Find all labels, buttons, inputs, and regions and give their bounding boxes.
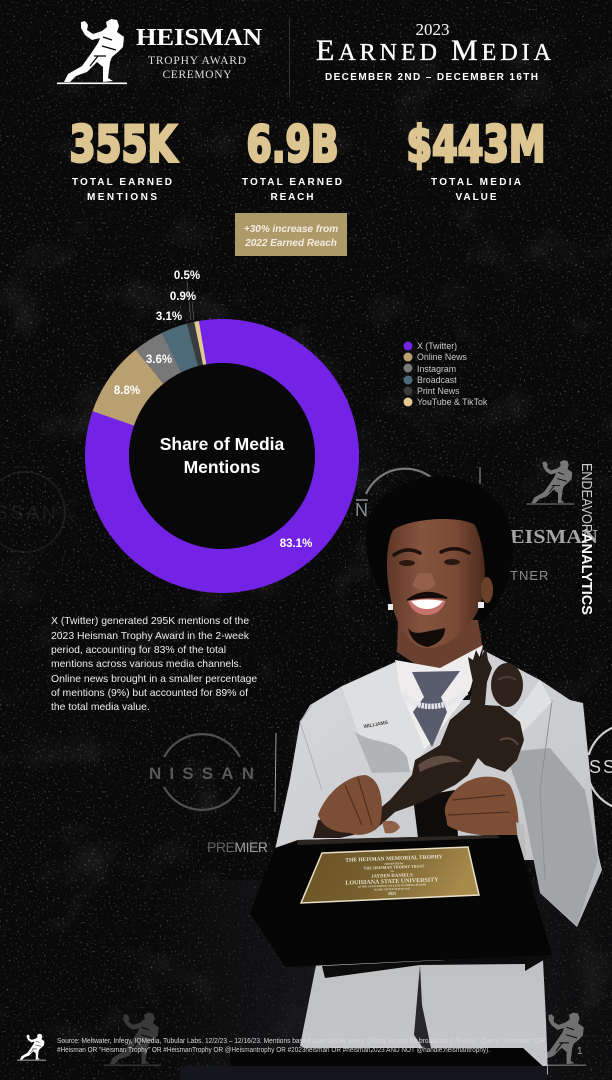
suit vent bbox=[414, 965, 431, 1048]
value: 6.9B bbox=[246, 116, 338, 174]
backdrop logo: left Nissan bbox=[0, 472, 65, 552]
label: TOTAL EARNED bbox=[72, 177, 172, 188]
body text: the total media value. bbox=[51, 702, 150, 713]
stat: total earned mentions bbox=[70, 116, 178, 203]
body text: X (Twitter) generated 295K mentions of the bbox=[51, 616, 249, 627]
trophy figure bbox=[313, 648, 524, 838]
left hand bbox=[318, 775, 400, 835]
photo: Jayden Daniels holding the trophy bbox=[180, 476, 602, 1080]
body text: mentions across various media channels. bbox=[51, 659, 242, 670]
label line 2: REACH bbox=[270, 192, 314, 203]
plaque: TO bbox=[390, 870, 394, 873]
body text: 2023 Heisman Trophy Award in the 2-week bbox=[51, 631, 250, 642]
slices bbox=[60, 294, 384, 618]
center title bbox=[160, 434, 284, 477]
jacket bbox=[275, 650, 602, 927]
slice labels bbox=[114, 270, 312, 550]
vertical brand: Endeavor Analytics bbox=[578, 463, 595, 615]
heading: 2023 Earned Media bbox=[316, 20, 552, 83]
value: 355K bbox=[70, 116, 178, 174]
body text: Online news brought in a smaller percentage bbox=[51, 674, 257, 685]
slice labels: 83.1% bbox=[280, 538, 312, 550]
legend: Instagram bbox=[417, 364, 456, 374]
slice labels: 8.8% bbox=[114, 385, 140, 397]
shirt bbox=[395, 645, 483, 750]
backdrop logo: right Nissan bbox=[586, 724, 612, 810]
slice labels: 3.6% bbox=[146, 354, 172, 366]
stat: total earned reach bbox=[242, 116, 342, 203]
watch bbox=[516, 822, 526, 860]
earrings bbox=[388, 602, 484, 610]
hair bbox=[366, 476, 513, 626]
source note: Source: Meltwater, Infegy, IQMedia, Tubular Labs. 12/2/23 – 12/16/23. Mentions based upon below query. Global except for broadcast (US only). Query: "Heisman" OR bbox=[57, 1038, 545, 1045]
goatee bbox=[408, 628, 445, 647]
eyebrows bbox=[394, 549, 469, 555]
subtitle: TROPHY AWARD bbox=[148, 55, 246, 67]
chain bbox=[403, 692, 467, 706]
year: 2023 bbox=[416, 20, 450, 39]
backdrop logo: Heisman right bbox=[510, 460, 599, 583]
plaque: LOUISIANA STATE UNIVERSITY bbox=[345, 877, 439, 887]
legend: Online News bbox=[417, 352, 467, 362]
header logo: Heisman Trophy Award Ceremony bbox=[57, 19, 263, 84]
legend: Broadcast bbox=[417, 375, 457, 385]
plaque bbox=[301, 847, 479, 903]
trophy highlights bbox=[418, 756, 462, 772]
header divider bbox=[288, 18, 290, 98]
smile bbox=[408, 598, 446, 615]
backdrop logo: Heisman right: EISMAN bbox=[510, 526, 599, 548]
plaque: IN THE UNITED STATES FOR bbox=[374, 887, 410, 892]
backdrop logo: Heisman right: TNER bbox=[510, 568, 549, 583]
slice labels: 0.9% bbox=[170, 291, 196, 303]
backdrop sponsor logos bbox=[0, 460, 612, 1066]
plaque: AS THE OUTSTANDING COLLEGE FOOTBALL PLAYER bbox=[358, 883, 426, 889]
backdrop logo: footer player right bbox=[529, 1013, 586, 1066]
icon: small Heisman logo bbox=[17, 1034, 46, 1060]
podium bbox=[230, 1048, 547, 1070]
leader lines bbox=[187, 282, 194, 320]
backdrop text: premier: PREMIER bbox=[207, 839, 268, 855]
stat: total media value bbox=[406, 116, 546, 203]
source note: #Heisman OR "Heisman Trophy" OR #HeismanTrophy OR @Heismantrophy OR #2023heisman OR #heisman2023 AND NOT @handle:heismantrophy). bbox=[57, 1047, 490, 1054]
trophy body bbox=[313, 648, 524, 838]
trophy base bbox=[250, 835, 552, 967]
base underside shadow bbox=[322, 955, 552, 978]
wordmark: HEISMAN bbox=[136, 25, 263, 51]
vertical brand: Endeavor Analytics: ENDEAVOR bbox=[578, 463, 595, 533]
callout: +30% increase: 2022 Earned Reach bbox=[244, 238, 337, 249]
eyes bbox=[399, 559, 460, 566]
callout: +30% increase: +30% increase from bbox=[244, 224, 338, 235]
ear bbox=[481, 577, 493, 603]
legend: YouTube & TikTok bbox=[417, 397, 488, 407]
plaque: 2023 bbox=[388, 891, 396, 896]
body text bbox=[51, 616, 257, 713]
date range: DECEMBER 2ND – DECEMBER 16TH bbox=[325, 72, 538, 83]
moustache bbox=[407, 592, 447, 600]
plaque: THE HEISMAN MEMORIAL TROPHY bbox=[345, 854, 443, 864]
center title: Share of Media bbox=[160, 434, 284, 454]
source note bbox=[57, 1038, 545, 1054]
nose bbox=[412, 573, 436, 590]
body text: of mentions (9%) but accounted for 89% of bbox=[51, 688, 248, 699]
trophy rear leg bbox=[413, 790, 458, 838]
tie bbox=[412, 671, 460, 747]
plaque: THE HEISMAN TROPHY TRUST bbox=[364, 863, 425, 871]
backdrop logo: center Nissan: N bbox=[355, 500, 368, 520]
label: TOTAL MEDIA bbox=[431, 177, 521, 188]
lapel pin: WILLIAMS bbox=[363, 720, 389, 730]
page number: 1 bbox=[577, 1046, 583, 1057]
label: TOTAL EARNED bbox=[242, 177, 342, 188]
donut chart: share of media mentions bbox=[60, 270, 384, 618]
legend: Print News bbox=[417, 386, 460, 396]
head bbox=[387, 519, 485, 648]
vertical brand: Endeavor Analytics: ANALYTICS bbox=[578, 533, 595, 615]
value: $443M bbox=[406, 116, 546, 174]
plaque: PRESENTED BY bbox=[384, 862, 404, 866]
inner disc bbox=[129, 363, 315, 549]
backdrop logo: lower Nissan: NISSAN bbox=[149, 764, 254, 783]
backdrop logo: footer player left bbox=[104, 1013, 161, 1066]
subtitle line 2: CEREMONY bbox=[162, 69, 232, 81]
slice labels: 0.5% bbox=[174, 270, 200, 282]
legend: X (Twitter) bbox=[417, 341, 457, 351]
jacket shading bbox=[342, 663, 425, 773]
label line 2: MENTIONS bbox=[87, 192, 157, 203]
label line 2: VALUE bbox=[456, 192, 497, 203]
title: EARNED MEDIA bbox=[316, 34, 552, 67]
slice labels: 3.1% bbox=[156, 311, 182, 323]
icon: Heisman player bbox=[57, 19, 127, 84]
base top edge bbox=[297, 835, 500, 845]
lower suit bbox=[300, 960, 548, 1075]
center title: Mentions bbox=[184, 457, 261, 477]
backdrop logo: center Nissan bbox=[355, 467, 480, 520]
callout: +30% increase bbox=[235, 213, 347, 256]
trophy head bbox=[491, 663, 523, 707]
backdrop logo: lower Nissan bbox=[149, 733, 276, 812]
plaque: JAYDEN DANIELS bbox=[371, 873, 413, 880]
body text: period, accounting for 83% of the total bbox=[51, 645, 226, 656]
neck bbox=[397, 620, 483, 680]
legend bbox=[404, 341, 488, 407]
right hand bbox=[445, 777, 519, 837]
